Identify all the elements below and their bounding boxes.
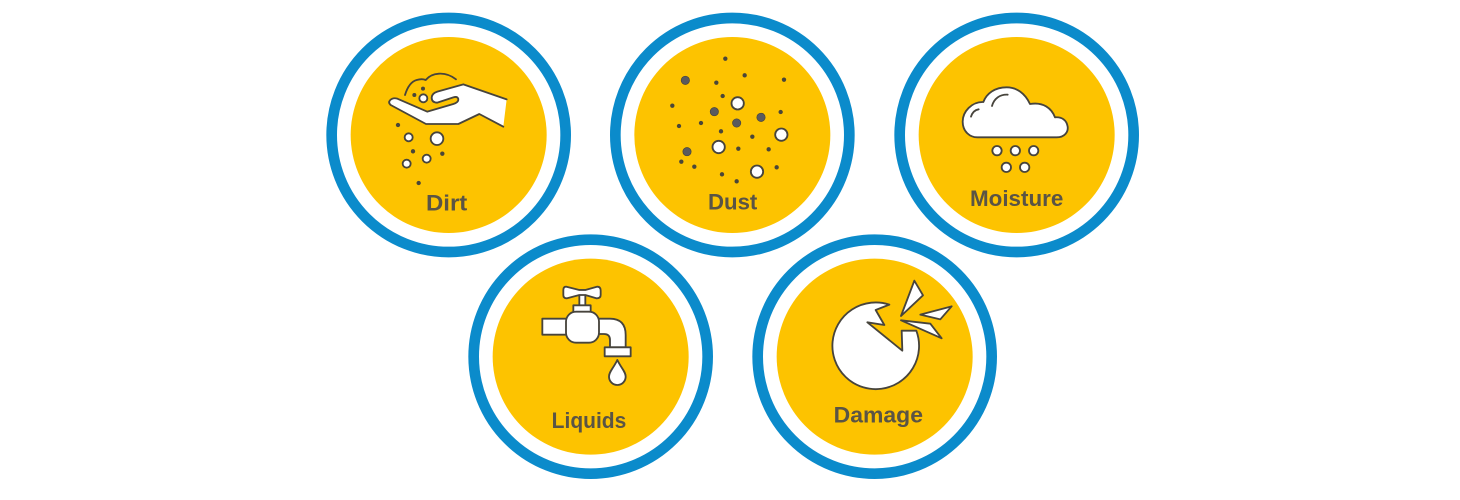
icon: cloud with droplets — [963, 87, 1068, 172]
label: Dust: Dust — [708, 190, 758, 215]
panel: damage — [758, 240, 992, 474]
icon: dust particles — [670, 56, 787, 183]
icon: dripping tap — [542, 287, 631, 385]
panel: dust — [615, 18, 849, 252]
label: Dirt: Dirt — [426, 191, 468, 216]
panel: liquids — [474, 240, 708, 474]
label: Moisture: Moisture — [970, 186, 1063, 211]
panel: moisture — [900, 18, 1134, 252]
label: Damage: Damage — [834, 403, 923, 428]
panel: dirt — [332, 18, 566, 252]
label: Liquids: Liquids — [552, 408, 626, 433]
icon: shattered disc — [832, 281, 952, 389]
icon: hand with falling dirt — [389, 74, 507, 185]
